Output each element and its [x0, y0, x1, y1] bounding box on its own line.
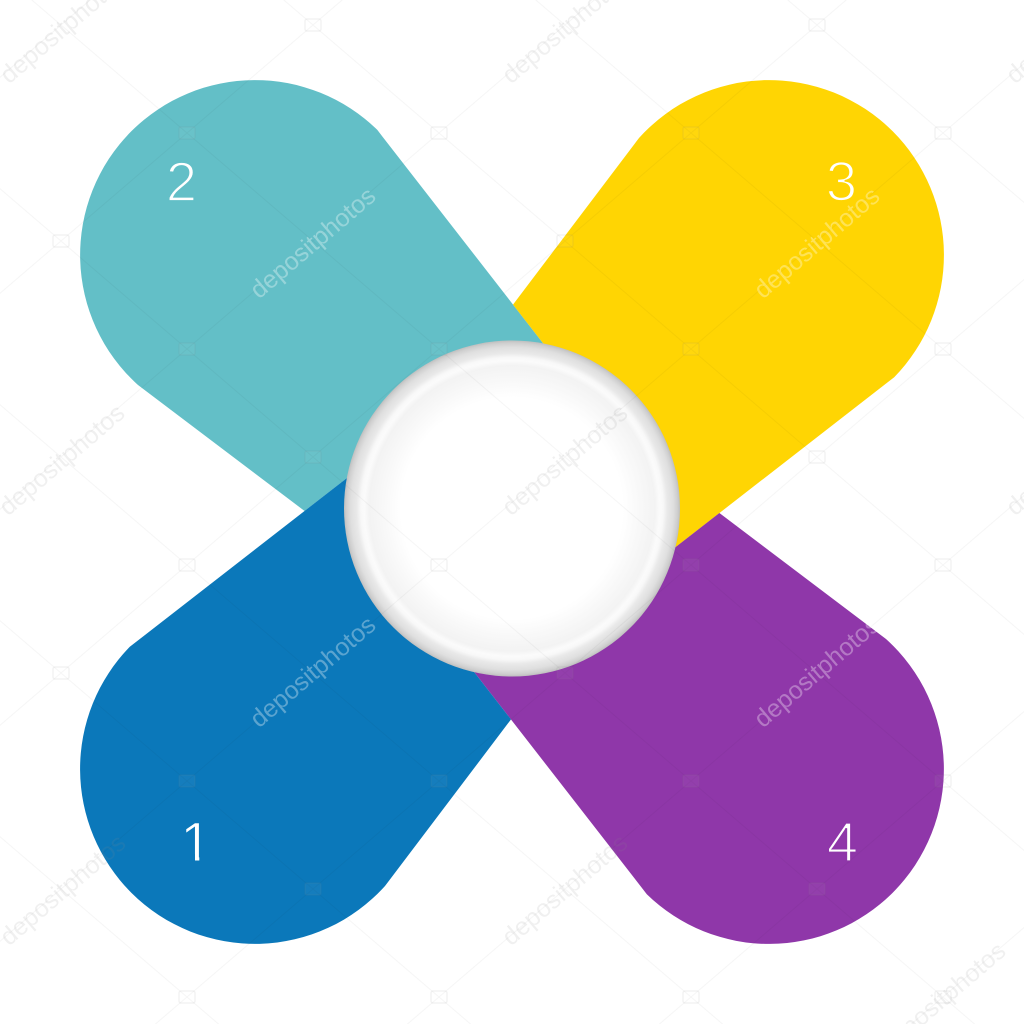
watermark group: depositphotos — [497, 829, 633, 951]
number 3: 3 — [826, 150, 857, 212]
watermark group: depositphotos — [245, 611, 381, 733]
panel: petal 1 blue — [80, 464, 512, 944]
number 2: 2 — [166, 150, 197, 213]
watermark group: depositphotos — [749, 182, 885, 304]
watermark group: depositphotos — [749, 611, 885, 733]
panel: petal 2 teal — [80, 80, 560, 512]
number 4: 4 — [827, 810, 858, 873]
watermark group: depositphotos — [245, 182, 381, 304]
panel: petal 3 yellow — [512, 80, 944, 560]
number 1: 1 — [180, 810, 212, 873]
center circle — [344, 340, 680, 676]
panel: petal 4 purple — [464, 512, 944, 944]
watermark group: depositphotos — [497, 399, 633, 521]
